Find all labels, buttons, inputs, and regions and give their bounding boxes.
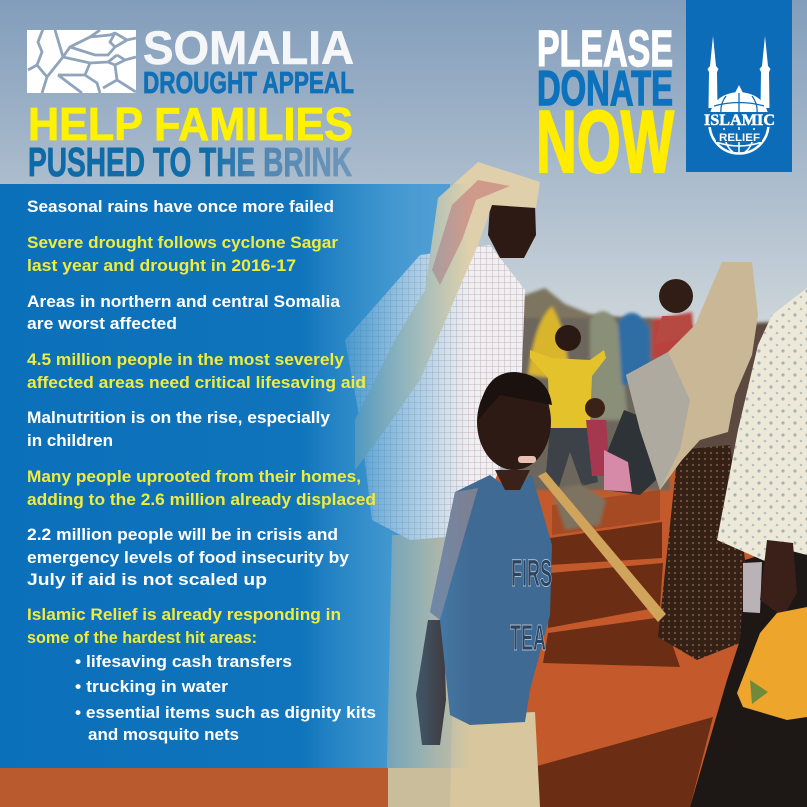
heading: SOMALIA: SOMALIA	[143, 21, 354, 74]
logo: Somalia appeal map pattern	[27, 29, 136, 93]
text block: severe drought: last year and drought in 2016-17	[27, 257, 296, 275]
text block: areas affected	[27, 293, 341, 333]
panel: blue fact panel	[0, 184, 470, 768]
bullet list: response items: • lifesaving cash transfers	[75, 653, 292, 671]
person in floral shirt with jerry can	[690, 288, 807, 807]
text block: malnutrition	[27, 409, 331, 450]
dry shrub	[552, 484, 606, 530]
background: red earth ground	[0, 470, 807, 807]
boy in blue t-shirt	[416, 372, 552, 807]
text block: Islamic Relief response	[27, 606, 341, 647]
call to action: PLEASE DONATE NOW	[536, 20, 674, 191]
icon: minarets	[708, 36, 770, 108]
DONATE: DONATE	[537, 62, 673, 116]
ground shadows	[530, 490, 713, 807]
heading: PUSHED TO THE BRINK: PUSHED TO THE BRINK	[28, 139, 352, 185]
small child in red	[585, 398, 610, 476]
background: blue-tinted crowd behind the panel	[0, 184, 450, 768]
text block: displaced: adding to the 2.6 million already displaced	[27, 491, 376, 509]
woman in beige headscarf and patterned skirt	[626, 262, 758, 660]
heading: HELP FAMILIES: HELP FAMILIES	[28, 98, 353, 150]
boy in blue t-shirt: TEA	[510, 617, 546, 658]
wooden stick	[538, 472, 666, 622]
text block: food insecurity: July if aid is not scaled up	[27, 571, 267, 589]
bullet list: response items	[75, 653, 376, 744]
text block: seasonal rains: Seasonal rains have once more failed	[27, 198, 334, 216]
seated figures	[604, 410, 656, 495]
man with headscarf	[345, 162, 540, 807]
bullet list: response items: • essential items such as dignity kits	[75, 704, 376, 722]
child in background	[654, 279, 694, 345]
text block: Islamic Relief response: some of the hardest hit areas:	[27, 629, 257, 647]
photo: crowd and people in the drought camp: FIRS	[511, 553, 552, 595]
heading: DROUGHT APPEAL: DROUGHT APPEAL	[143, 65, 354, 100]
text block: 4.5 million: 4.5 million people in the most severely	[27, 351, 345, 369]
RELIEF wordmark: RELIEF	[719, 132, 760, 144]
bullet list: response items: • trucking in water	[75, 678, 229, 696]
child in yellow shirt	[530, 325, 606, 490]
text block: displaced	[27, 468, 376, 509]
text block: malnutrition: in children	[27, 432, 113, 450]
text block: displaced: Many people uprooted from their homes,	[27, 468, 361, 486]
text block: areas affected: Areas in northern and central Somalia	[27, 293, 341, 311]
bullet list: response items: and mosquito nets	[88, 726, 239, 744]
text block: severe drought	[27, 234, 339, 275]
text block: food insecurity: emergency levels of food insecurity by	[27, 549, 350, 567]
text block: Islamic Relief response: Islamic Relief is already responding in	[27, 606, 341, 624]
photo: crowd and people in the drought camp	[0, 162, 807, 807]
text block: malnutrition: Malnutrition is on the rise, especially	[27, 409, 331, 427]
text block: 4.5 million	[27, 351, 366, 392]
text block: food insecurity: 2.2 million people will be in crisis and	[27, 526, 338, 544]
text block: 4.5 million: affected areas need critical lifesaving aid	[27, 374, 366, 392]
PLEASE: PLEASE	[537, 20, 673, 77]
distant trees on the horizon	[515, 288, 650, 340]
logo panel: Islamic Relief	[686, 0, 792, 172]
icon: dome and globe	[702, 85, 777, 154]
ISLAMIC wordmark: ISLAMIC	[704, 112, 775, 129]
background: sky	[0, 0, 807, 330]
text block: food insecurity	[27, 526, 350, 589]
text block: severe drought: Severe drought follows cyclone Sagar	[27, 234, 339, 252]
text block: areas affected: are worst affected	[27, 315, 177, 333]
foreground soil strip	[0, 768, 388, 807]
NOW: NOW	[536, 92, 674, 191]
distant crowd	[520, 306, 770, 490]
